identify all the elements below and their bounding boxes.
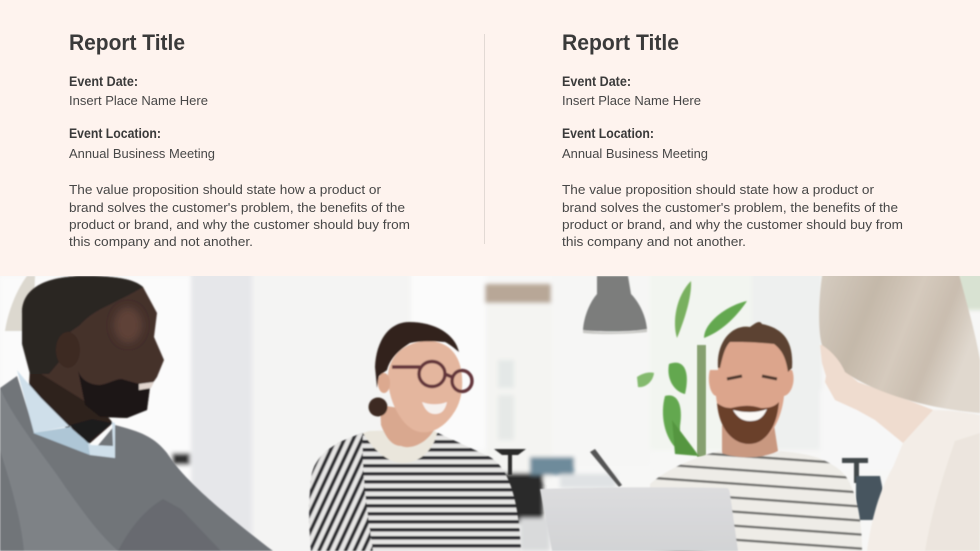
body text: value proposition: product or brand, and why the customer should buy from <box>562 217 903 232</box>
smile <box>733 409 767 421</box>
value: place name: Insert Place Name Here <box>562 93 701 108</box>
body text: value proposition: brand solves the customer's problem, the benefits of the <box>562 200 898 215</box>
background panel <box>0 0 980 276</box>
beard <box>78 370 150 418</box>
right column: report details <box>562 30 903 249</box>
office background <box>0 270 980 551</box>
shirt collar <box>17 370 115 458</box>
body text: value proposition: this company and not another. <box>69 234 253 249</box>
body text: value proposition: product or brand, and why the customer should buy from <box>69 217 410 232</box>
body text: value proposition: this company and not another. <box>562 234 746 249</box>
beard <box>717 402 779 444</box>
face <box>388 341 462 432</box>
body text: value proposition: brand solves the customer's problem, the benefits of the <box>69 200 405 215</box>
body text: value proposition <box>69 182 410 249</box>
neck <box>28 367 113 445</box>
laptop <box>540 487 738 551</box>
label: event date: Event Date: <box>562 74 631 89</box>
ear <box>56 332 80 368</box>
neck <box>722 425 778 457</box>
body text: value proposition: The value proposition should state how a product or <box>562 182 875 197</box>
blonde hair <box>819 270 980 413</box>
label: event location: Event Location: <box>69 126 161 141</box>
person 2: woman with glasses <box>309 322 521 551</box>
body text: value proposition: The value proposition should state how a product or <box>69 182 382 197</box>
person 1: man in grey sweater <box>0 276 273 551</box>
value: meeting name: Annual Business Meeting <box>69 146 215 161</box>
person 3: smiling bearded man <box>650 322 862 551</box>
person 4: blonde woman seen from the side <box>819 270 980 551</box>
smile <box>422 402 447 414</box>
hair <box>375 322 459 388</box>
value: place name: Insert Place Name Here <box>69 93 208 108</box>
value: meeting name: Annual Business Meeting <box>562 146 708 161</box>
desk lamp and chair shapes <box>5 276 884 520</box>
striped top <box>309 433 521 551</box>
hair bun <box>368 398 388 416</box>
pendant lamp <box>583 276 647 334</box>
left column: report details <box>69 30 410 249</box>
white blouse <box>867 410 980 551</box>
striped shirt <box>650 451 862 551</box>
hair <box>718 322 792 372</box>
label: event location: Event Location: <box>562 126 654 141</box>
face and neck <box>820 345 933 443</box>
collar <box>363 429 437 463</box>
photo: team meeting in a bright office <box>0 276 980 551</box>
plant <box>637 281 747 457</box>
hair <box>22 276 143 374</box>
head <box>22 276 164 418</box>
body text: value proposition <box>562 182 903 249</box>
glasses <box>392 362 472 392</box>
ear <box>378 373 390 393</box>
heading: report title: Report Title <box>69 30 185 55</box>
label: event date: Event Date: <box>69 74 138 89</box>
face <box>709 334 794 442</box>
heading: report title: Report Title <box>562 30 679 55</box>
grey sweater <box>0 376 273 551</box>
